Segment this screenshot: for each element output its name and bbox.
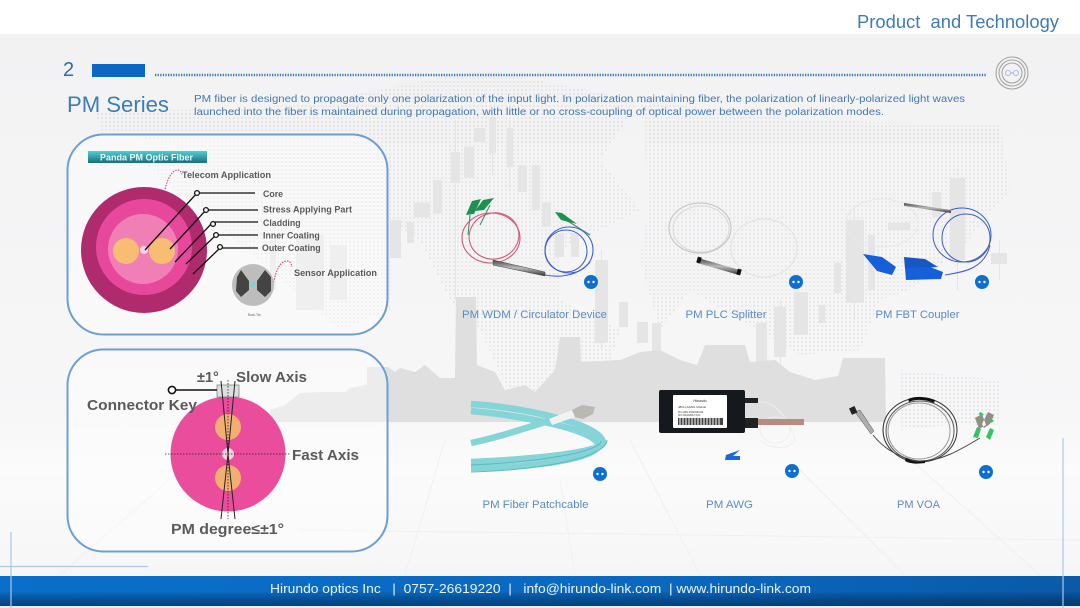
label: PM PLC Splitter: PM PLC Splitter [686, 309, 767, 321]
axis labels: ±1° [197, 370, 219, 386]
label: PM Fiber Patchcable: PM Fiber Patchcable [482, 499, 588, 511]
axis labels [87, 370, 359, 538]
leader lines [145, 191, 258, 274]
fiber labels: Core [263, 189, 283, 199]
product: PM FBT Coupler [846, 199, 991, 280]
red dotted callouts [165, 170, 292, 285]
product: PM Fiber Patchcable [471, 404, 607, 472]
background city skyline [270, 297, 886, 422]
connector key [168, 385, 239, 397]
icon: blue dot [975, 275, 989, 289]
heading: PM Series: PM Series [67, 92, 169, 117]
fiber labels: Cladding [263, 218, 301, 228]
label: PM VOA: PM VOA [897, 499, 941, 511]
banner label [88, 151, 207, 163]
product: PM AWG: SN: 00123456-T3-01 [678, 414, 701, 417]
intro paragraph: launched into the fiber is maintained during propagation, with little or no cross-coupling of optical power between the polarization modes. [194, 106, 884, 118]
section number: 2 [63, 59, 74, 81]
banner label: Panda PM Optic Fiber [100, 152, 194, 162]
icon: blue dot [789, 275, 803, 289]
fiber labels: Telecom Application [182, 170, 271, 180]
background candlesticks [270, 115, 1007, 375]
fiber labels: Stress Applying Part [263, 204, 352, 214]
panel: axis alignment [68, 350, 388, 552]
product: PM VOA [849, 397, 994, 464]
axis lines [165, 380, 291, 519]
product: PM AWG: PN: AWG-48200200-96 [678, 411, 704, 414]
panel: panda PM optic fiber [68, 134, 388, 334]
axis labels: PM degree≤±1° [171, 522, 284, 538]
intro paragraph [194, 93, 965, 118]
product: PM AWG [659, 390, 804, 460]
icon: blue dot [979, 465, 993, 479]
product: PM AWG: Hirundo [693, 399, 707, 403]
footer bar [0, 576, 1080, 608]
axis labels: Fast Axis [292, 448, 359, 464]
fiber end face [170, 396, 286, 512]
fiber cross-section [81, 187, 207, 313]
dotted divider [155, 74, 987, 76]
fiber labels [182, 170, 377, 278]
fiber labels: Outer Coating [262, 243, 321, 253]
product: PM WDM / Circulator Device [462, 198, 593, 276]
product: PM AWG: 48CH AAWG Module [678, 405, 706, 409]
fiber labels: Sensor Application [294, 268, 377, 278]
section bar [92, 64, 145, 77]
bow-tie fiber icon: Bow-Tie [248, 313, 261, 317]
label: PM FBT Coupler: PM FBT Coupler [876, 309, 960, 321]
icon: blue dot [785, 464, 799, 478]
product: PM PLC Splitter [669, 203, 797, 277]
axis labels: Connector Key [87, 398, 197, 414]
label: PM WDM / Circulator Device: PM WDM / Circulator Device [462, 309, 607, 321]
footer contact text: Hirundo optics Inc | 0757-26619220 | info@hirundo-link.com | www.hirundo-link.com [270, 581, 811, 596]
label: PM AWG: PM AWG [706, 499, 753, 511]
fiber labels: Inner Coating [263, 230, 320, 240]
background world map [96, 70, 1010, 430]
axis labels: Slow Axis [236, 370, 307, 386]
intro paragraph: PM fiber is designed to propagate only one polarization of the input light. In polarization maintaining fiber, the polarization of linearly-polarized light waves [194, 93, 965, 105]
icon: blue dot [593, 467, 607, 481]
icon: concentric rings [996, 57, 1028, 89]
bow-tie fiber icon [232, 264, 274, 317]
header title: Product and Technology: Product and Technology [857, 11, 1060, 32]
icon: blue dot [584, 275, 598, 289]
